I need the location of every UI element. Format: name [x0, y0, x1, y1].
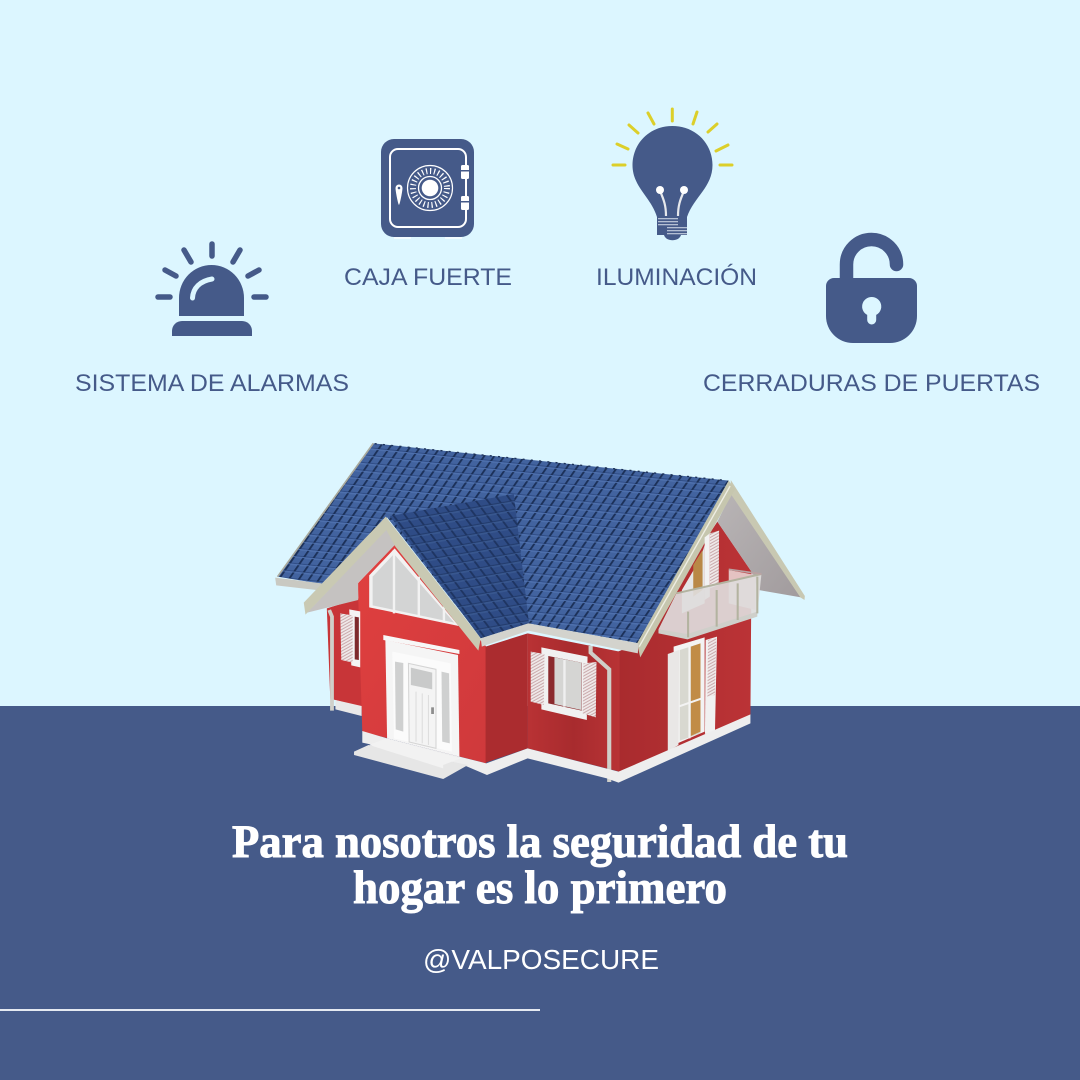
main roof	[278, 443, 729, 643]
upper balcony door and shutter	[682, 531, 719, 613]
gable wall	[358, 545, 486, 763]
dormer roof	[390, 494, 529, 638]
background: sky	[0, 0, 1080, 706]
icon: open padlock	[826, 240, 917, 343]
balcony	[658, 569, 761, 639]
heading: Para nosotros la seguridad de tu	[232, 816, 848, 868]
icon: alarm siren	[158, 244, 266, 336]
label: cerraduras de puertas: CERRADURAS DE PUERTAS	[703, 370, 1040, 397]
gable window	[369, 548, 459, 626]
front gable soffit	[307, 528, 406, 613]
icon: safe box	[381, 139, 474, 239]
right gable fascia	[731, 480, 805, 600]
left gutter	[275, 578, 322, 591]
centre wall	[528, 633, 620, 772]
left wing window	[340, 609, 360, 667]
heading	[232, 816, 848, 914]
right gable soffit	[717, 493, 801, 597]
downpipe	[591, 646, 609, 782]
label: sistema de alarmas: SISTEMA DE ALARMAS	[75, 370, 349, 397]
front gable fascia	[304, 517, 481, 651]
front door surround	[383, 635, 459, 757]
icon: light bulb	[613, 109, 732, 240]
left wing wall	[327, 598, 362, 707]
middle recessed wall	[486, 633, 528, 763]
eave gutter	[481, 623, 638, 653]
heading: hogar es lo primero	[353, 862, 727, 914]
lower right door with shutters	[668, 637, 717, 752]
footer rule	[0, 1009, 540, 1011]
panel: bottom blue band	[0, 706, 1080, 1080]
left downpipe	[329, 610, 332, 711]
label: iluminacion: ILUMINACIÓN	[596, 264, 757, 291]
label: caja fuerte: CAJA FUERTE	[344, 264, 512, 291]
handle text: @VALPOSECURE	[423, 944, 659, 975]
entrance steps	[354, 738, 468, 779]
centre window with shutters	[531, 647, 596, 720]
right gable wall	[618, 522, 751, 773]
plinth	[362, 714, 750, 783]
illustration: red house with blue roof	[275, 443, 805, 783]
right roof fascia	[637, 481, 735, 657]
left wing plinth	[335, 700, 362, 716]
